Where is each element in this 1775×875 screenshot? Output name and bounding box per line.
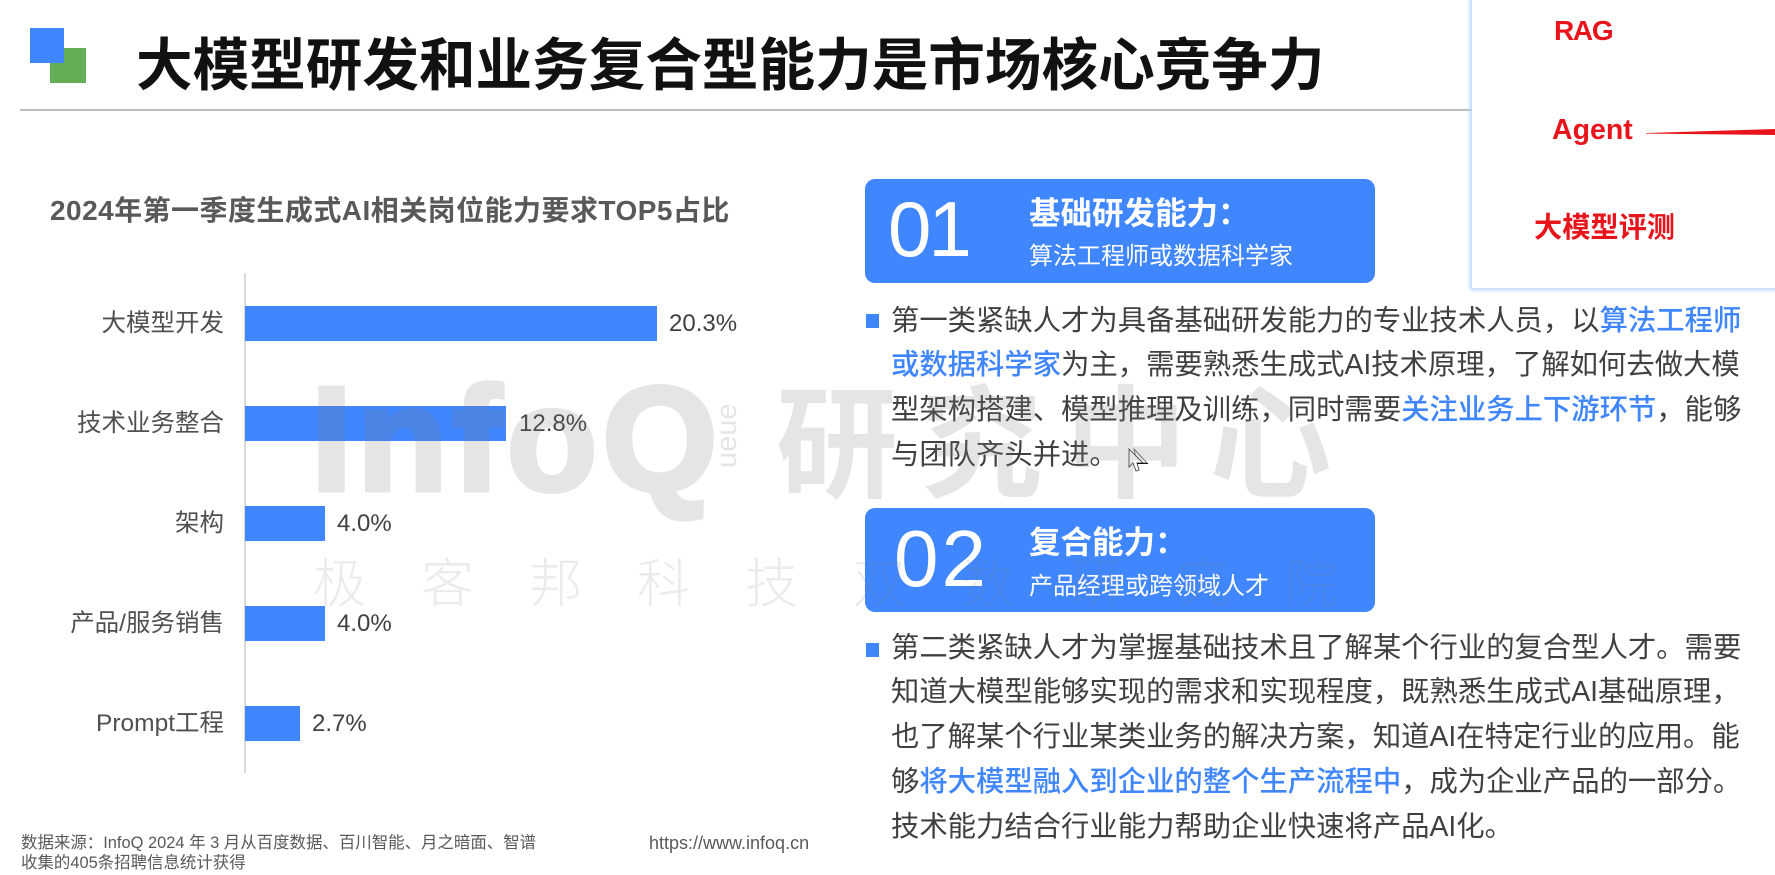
number 01: 01	[888, 185, 969, 273]
data source note: 收集的405条招聘信息统计获得	[21, 854, 246, 872]
website url: https://www.infoq.cn	[649, 833, 809, 853]
bar: 技术业务整合: 12.8%	[519, 410, 587, 437]
watermark: InfoQ 研究中心: ueue	[711, 403, 743, 468]
text block 02	[891, 632, 1741, 843]
label: Agent: Agent	[1552, 114, 1633, 146]
subheading: 产品经理或跨领域人才	[1029, 573, 1269, 600]
text block 02: 知道大模型能够实现的需求和实现程度，既熟悉生成式AI基础原理，	[891, 676, 1740, 708]
bar: Prompt工程: 2.7%	[312, 710, 367, 737]
logo icon	[30, 28, 86, 83]
data source note: 数据来源：InfoQ 2024 年 3 月从百度数据、百川智能、月之暗面、智谱	[21, 834, 536, 852]
panel: red annotations overlay	[1472, 0, 1775, 288]
bar: 架构: 4.0%	[337, 510, 392, 537]
text block 01: 与团队齐头并进。	[891, 439, 1118, 471]
bar: 产品/服务销售: 产品/服务销售	[70, 610, 224, 637]
bar: Prompt工程	[96, 706, 367, 741]
bar: 技术业务整合: 技术业务整合	[77, 410, 224, 437]
bar: 大模型开发: 大模型开发	[102, 310, 224, 337]
bar: 架构	[175, 506, 392, 541]
title: 大模型研发和业务复合型能力是市场核心竞争力	[136, 34, 1324, 97]
text block 01: 或数据科学家为主，需要熟悉生成式AI技术原理，了解如何去做大模	[891, 349, 1740, 381]
heading: 基础研发能力: 基础研发能力：	[1029, 195, 1250, 231]
label: 大模型评测: 大模型评测	[1534, 211, 1675, 243]
bar: Prompt工程: Prompt工程	[96, 710, 224, 737]
bar: 产品/服务销售	[70, 606, 392, 641]
panel: 02 header	[865, 508, 1375, 612]
text block 01	[891, 305, 1741, 471]
heading: 复合能力: 复合能力：	[1029, 524, 1187, 560]
label: RAG: RAG	[1554, 15, 1612, 46]
bar chart	[70, 273, 737, 773]
text block 01: 型架构搭建、模型推理及训练，同时需要关注业务上下游环节，能够	[891, 394, 1741, 426]
data source note	[21, 834, 536, 872]
panel: 01 header	[865, 179, 1375, 283]
bar: 技术业务整合	[77, 406, 587, 441]
bar: 产品/服务销售: 4.0%	[337, 610, 392, 637]
subheading: 算法工程师或数据科学家	[1029, 243, 1293, 270]
bar: 架构: 架构	[175, 510, 224, 537]
text block 02: 也了解某个行业某类业务的解决方案，知道AI在特定行业的应用。能	[891, 721, 1740, 753]
bar: 大模型开发	[102, 306, 737, 341]
bullet 01	[866, 314, 879, 328]
text block 01: 第一类紧缺人才为具备基础研发能力的专业技术人员，以算法工程师	[891, 305, 1741, 337]
text block 02: 第二类紧缺人才为掌握基础技术且了解某个行业的复合型人才。需要	[891, 632, 1741, 664]
icon: mouse cursor	[1128, 448, 1148, 472]
number 02: 02	[894, 514, 989, 603]
bullet 02	[866, 643, 879, 657]
text block 02: 够将大模型融入到企业的整个生产流程中，成为企业产品的一部分。	[891, 766, 1741, 798]
bar: 大模型开发: 20.3%	[669, 310, 737, 337]
chart title: 2024年第一季度生成式AI相关岗位能力要求TOP5占比	[50, 195, 730, 226]
arrow line	[1646, 129, 1775, 135]
watermark: InfoQ 研究中心	[311, 370, 1360, 618]
text block 02: 技术能力结合行业能力帮助企业快速将产品AI化。	[891, 811, 1513, 843]
